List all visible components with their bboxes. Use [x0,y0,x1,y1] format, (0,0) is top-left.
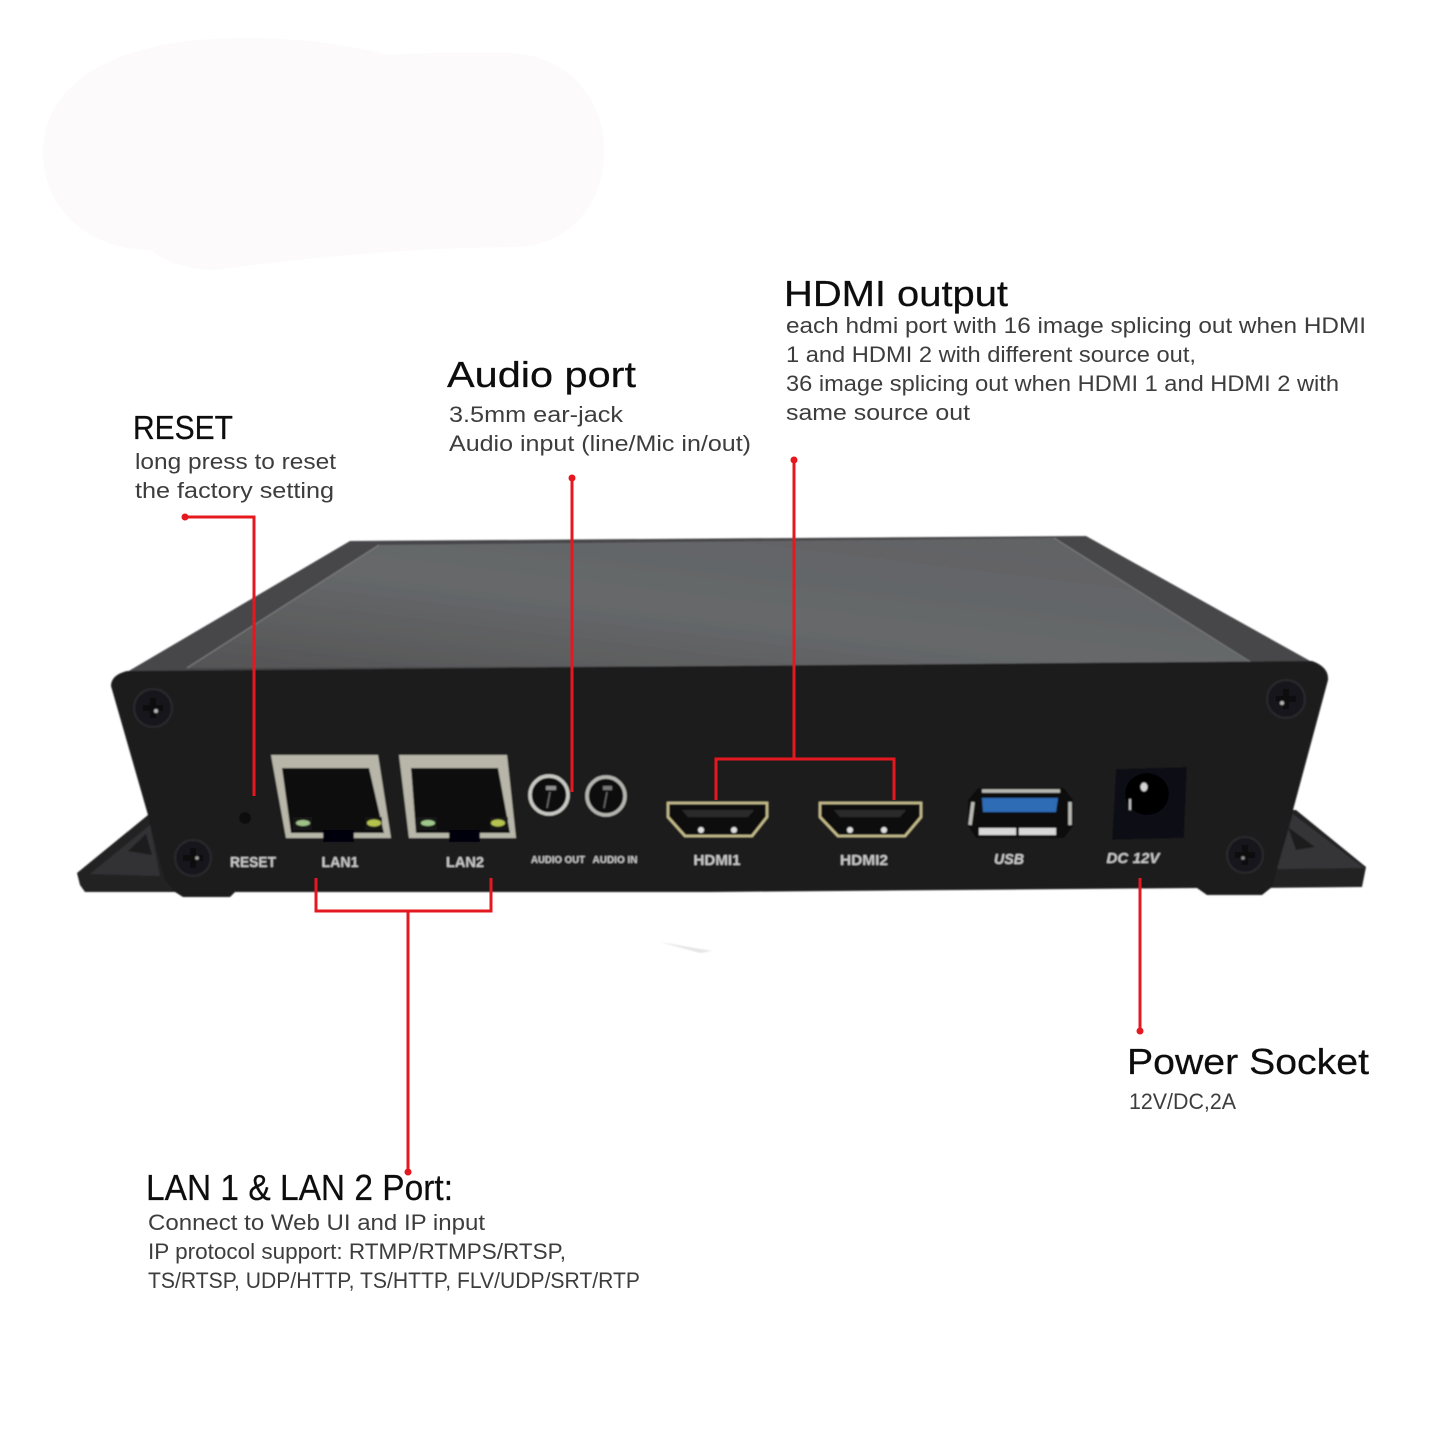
background blob [43,38,604,270]
callout text: reset [133,409,337,503]
screws [134,680,1305,876]
callout line: power [1136,878,1144,1034]
callout text: audio port: Audio input (line/Mic in/out) [449,431,751,456]
port labels: RESET [230,854,276,871]
callout text: HDMI output: 1 and HDMI 2 with different source out, [786,342,1196,367]
callout text: reset: long press to reset [135,449,337,474]
callout text: power socket: 12V/DC,2A [1129,1089,1236,1114]
callout text: reset: RESET [133,409,233,446]
callout text: LAN ports: IP protocol support: RTMP/RTMPS/RTSP, [148,1239,566,1264]
audio out jack [530,776,568,814]
port labels: AUDIO IN [592,855,638,866]
top panel [127,536,1312,672]
shadow streak under device [660,942,712,953]
callout text: HDMI output: same source out [786,400,971,425]
callout text: HDMI output: each hdmi port with 16 image splicing out when HDMI [786,313,1366,338]
HDMI1 port [668,803,767,836]
callout line: LAN [316,878,491,1176]
port labels: LAN1 [322,854,358,871]
USB port [968,788,1073,838]
port labels: AUDIO OUT [531,855,585,866]
callout text: LAN ports: Connect to Web UI and IP input [148,1210,486,1235]
callout text: power socket: Power Socket [1127,1041,1369,1082]
port labels: DC 12V [1106,850,1162,867]
HDMI2 port [820,803,921,836]
callout line: HDMI [716,456,894,800]
callout text: audio port: 3.5mm ear-jack [449,402,624,427]
callout text: HDMI output: HDMI output [784,273,1008,314]
DC power socket [1112,767,1187,840]
port labels: HDMI2 [840,852,888,869]
callout line: audio [568,474,576,792]
callout text: HDMI output: 36 image splicing out when HDMI 1 and HDMI 2 with [786,371,1339,396]
callout text: reset: the factory setting [135,478,334,503]
port labels: HDMI1 [694,852,740,869]
right mounting flange [1260,810,1366,888]
callout text: LAN ports [146,1167,640,1293]
port labels [230,850,1162,871]
callout text: HDMI output [784,273,1366,425]
port labels: USB [994,851,1024,868]
callout text: power socket [1127,1041,1369,1114]
audio in jack [587,777,625,815]
port labels: LAN2 [446,854,484,871]
callout text: audio port: Audio port [447,354,636,395]
callout text: LAN ports: LAN 1 & LAN 2 Port: [146,1167,453,1208]
LAN1 port [271,755,391,842]
device: rear view of video box [77,536,1366,897]
callout text: LAN ports: TS/RTSP, UDP/HTTP, TS/HTTP, FLV/UDP/SRT/RTP [148,1268,640,1293]
callout line: reset [182,514,254,796]
reset hole [239,812,251,824]
front panel [111,661,1328,897]
left mounting flange [77,815,185,892]
callout text: audio port [447,354,751,456]
LAN2 port [399,755,516,842]
